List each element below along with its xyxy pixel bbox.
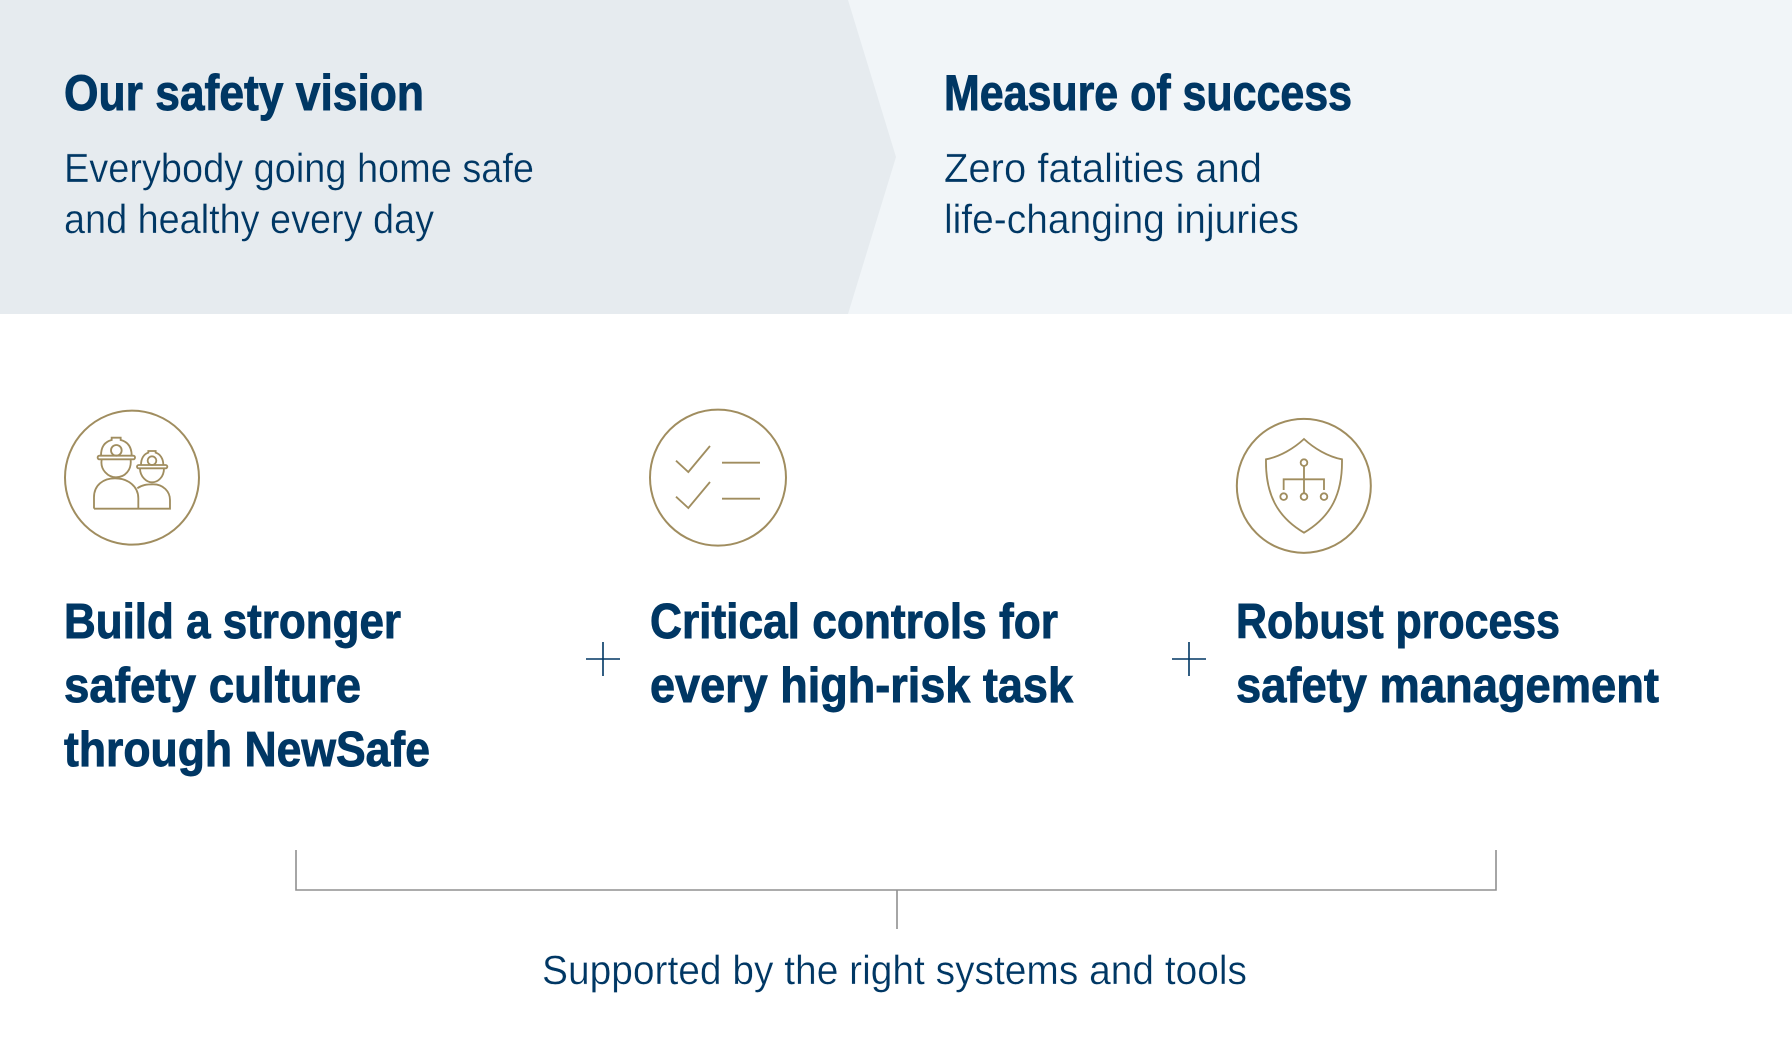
heading: robust process safety management: Robust process bbox=[1236, 595, 1560, 649]
icon: shield with network bbox=[1237, 419, 1371, 553]
text: everybody going home safe: Everybody going home safe bbox=[64, 145, 534, 191]
heading: critical controls bbox=[650, 595, 1074, 713]
heading: critical controls: Critical controls for bbox=[650, 595, 1058, 649]
text: everybody going home safe: and healthy every day bbox=[64, 196, 434, 242]
heading: build a stronger safety culture: through NewSafe bbox=[64, 723, 430, 777]
text: zero fatalities: life-changing injuries bbox=[944, 196, 1299, 242]
panel: measure of success bbox=[0, 0, 1792, 314]
heading: robust process safety management: safety management bbox=[1236, 659, 1659, 713]
icon: plus 1 bbox=[586, 642, 620, 676]
text: everybody going home safe bbox=[64, 145, 534, 242]
heading: our safety vision: Our safety vision bbox=[64, 65, 424, 121]
heading: build a stronger safety culture: safety culture bbox=[64, 659, 361, 713]
heading: measure of success: Measure of success bbox=[944, 65, 1352, 121]
heading: critical controls: every high-risk task bbox=[650, 659, 1074, 713]
text: zero fatalities: Zero fatalities and bbox=[944, 145, 1262, 191]
icon: plus 2 bbox=[1172, 642, 1206, 676]
icon: workers with hard hats bbox=[65, 411, 199, 545]
heading: build a stronger safety culture: Build a stronger bbox=[64, 595, 401, 649]
panel: safety vision chevron bbox=[0, 0, 896, 314]
bracket connector bbox=[296, 850, 1496, 929]
text: zero fatalities bbox=[944, 145, 1299, 242]
text: supported by: Supported by the right systems and tools bbox=[542, 947, 1247, 993]
heading: robust process safety management bbox=[1236, 595, 1659, 713]
icon: checklist bbox=[650, 410, 786, 546]
heading: build a stronger safety culture bbox=[64, 595, 430, 777]
